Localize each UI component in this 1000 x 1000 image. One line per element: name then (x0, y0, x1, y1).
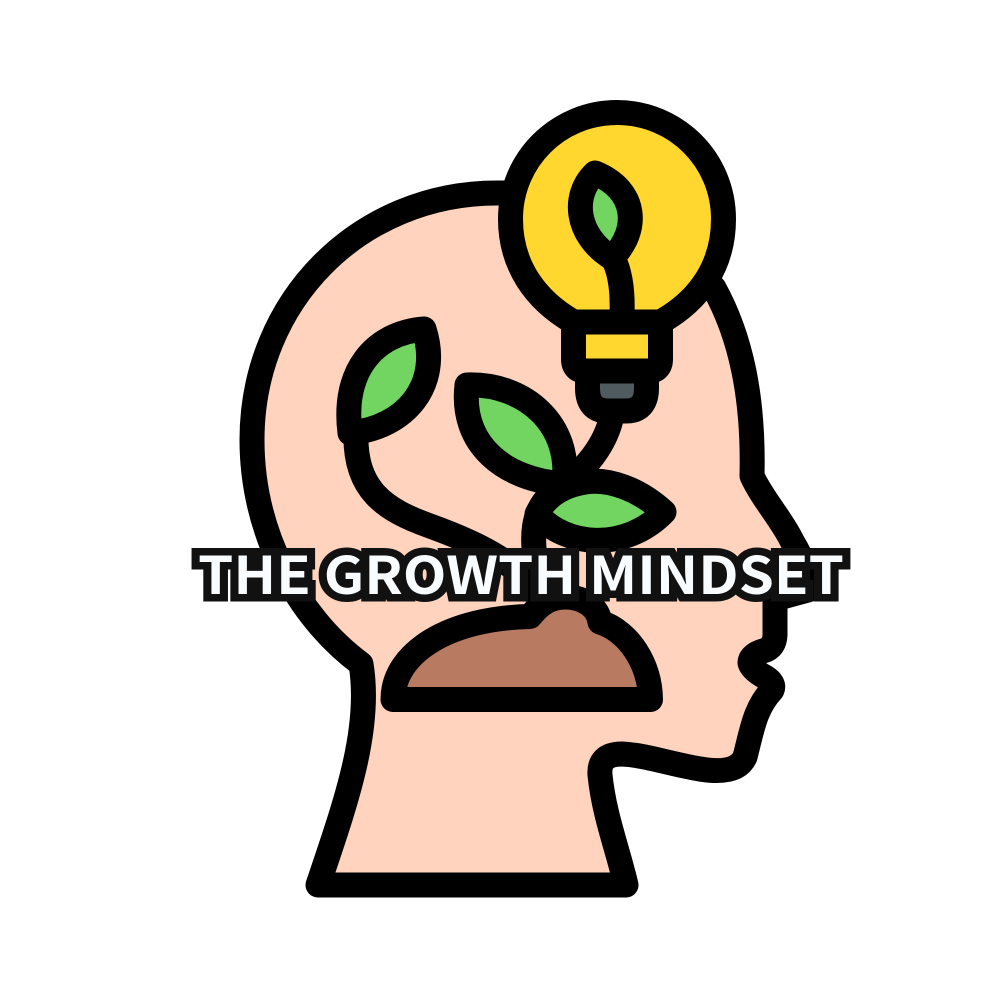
icon: soil mound (393, 597, 650, 700)
icon: leaf inside bulb (580, 173, 630, 258)
icon: head silhouette (252, 193, 809, 885)
icon: bulb glass (510, 112, 724, 322)
icon: bulb filament stem (612, 256, 622, 315)
icon: plant stems (356, 415, 612, 610)
icon: bulb base (588, 371, 646, 411)
title: THE GROWTH MINDSET (198, 534, 844, 609)
icon: middle leaf (466, 385, 565, 484)
icon: right leaf (537, 481, 664, 540)
icon: left leaf (349, 329, 429, 433)
icon: light bulb (510, 112, 724, 411)
icon: bulb collar (574, 322, 660, 371)
